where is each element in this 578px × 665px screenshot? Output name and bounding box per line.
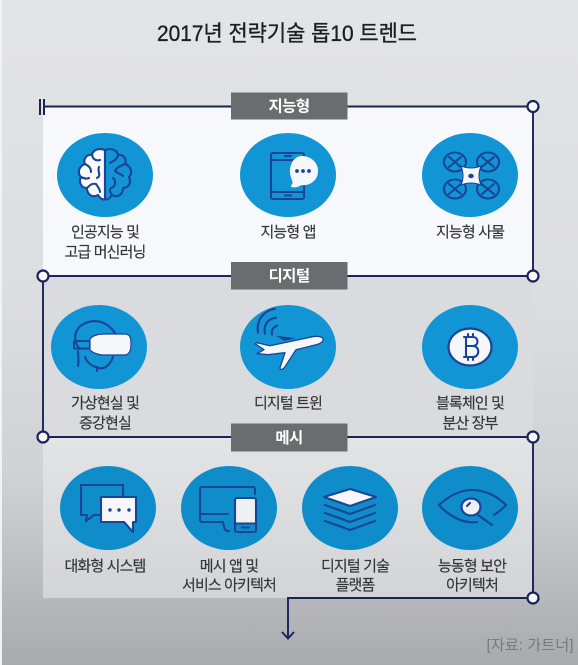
item: 인공지능 및 고급 머신러닝	[57, 133, 153, 261]
label: 서비스 아키텍처	[182, 577, 276, 594]
section label: 디지털: 디지털	[269, 267, 310, 285]
section label: 메시: 메시	[275, 429, 303, 447]
label: 지능형 사물	[436, 224, 504, 241]
label: 플랫폼	[336, 577, 374, 594]
label: 지능형 앱	[260, 224, 316, 241]
label: 증강현실	[79, 415, 131, 432]
icon: airplane with signal waves	[255, 309, 323, 370]
item: 디지털 트윈	[240, 305, 336, 412]
label: 디지털 트윈	[254, 395, 322, 412]
label: 능동형 보안	[438, 558, 507, 575]
flow line connecting sections	[38, 99, 538, 638]
label: 대화형 시스템	[64, 558, 146, 575]
label: 디지털 기술	[321, 558, 389, 575]
label: 블록체인 및	[436, 395, 504, 412]
label: 고급 머신러닝	[64, 244, 146, 261]
section label: 지능형	[231, 92, 348, 120]
label: 메시 앱 및	[200, 558, 258, 575]
item: 능동형 보안 아키텍처	[422, 466, 518, 594]
title: 2017년 전략기술 톱10 트렌드	[157, 21, 417, 46]
section label: 지능형: 지능형	[269, 98, 309, 116]
label: 분산 장부	[442, 415, 499, 432]
item: 메시 앱 및 서비스 아키텍처	[181, 466, 277, 594]
icon: monitor and phone	[200, 487, 256, 532]
item: 가상현실 및 증강현실	[51, 305, 147, 432]
label: 아키텍처	[446, 577, 498, 594]
item: 지능형 사물	[422, 133, 518, 241]
icon: eye with magnifier	[439, 490, 506, 525]
label: 인공지능 및	[71, 224, 139, 241]
icon: drone	[444, 152, 499, 198]
source note: [자료: 가트너]	[486, 637, 574, 654]
label: 가상현실 및	[71, 395, 139, 412]
icon: phone with chat bubble	[271, 153, 317, 199]
icon: brain	[79, 149, 131, 200]
item: 디지털 기술 플랫폼	[302, 466, 398, 594]
section label: 디지털	[231, 262, 348, 290]
item: 지능형 앱	[240, 133, 336, 241]
icon: VR headset	[74, 321, 131, 371]
icon: bitcoin coin	[448, 328, 492, 366]
item: 블록체인 및 분산 장부	[422, 305, 518, 432]
item: 대화형 시스템	[60, 466, 156, 575]
icon: chat bubbles	[81, 485, 136, 532]
section label: 메시	[231, 424, 348, 452]
icon: stacked layers	[324, 489, 376, 530]
